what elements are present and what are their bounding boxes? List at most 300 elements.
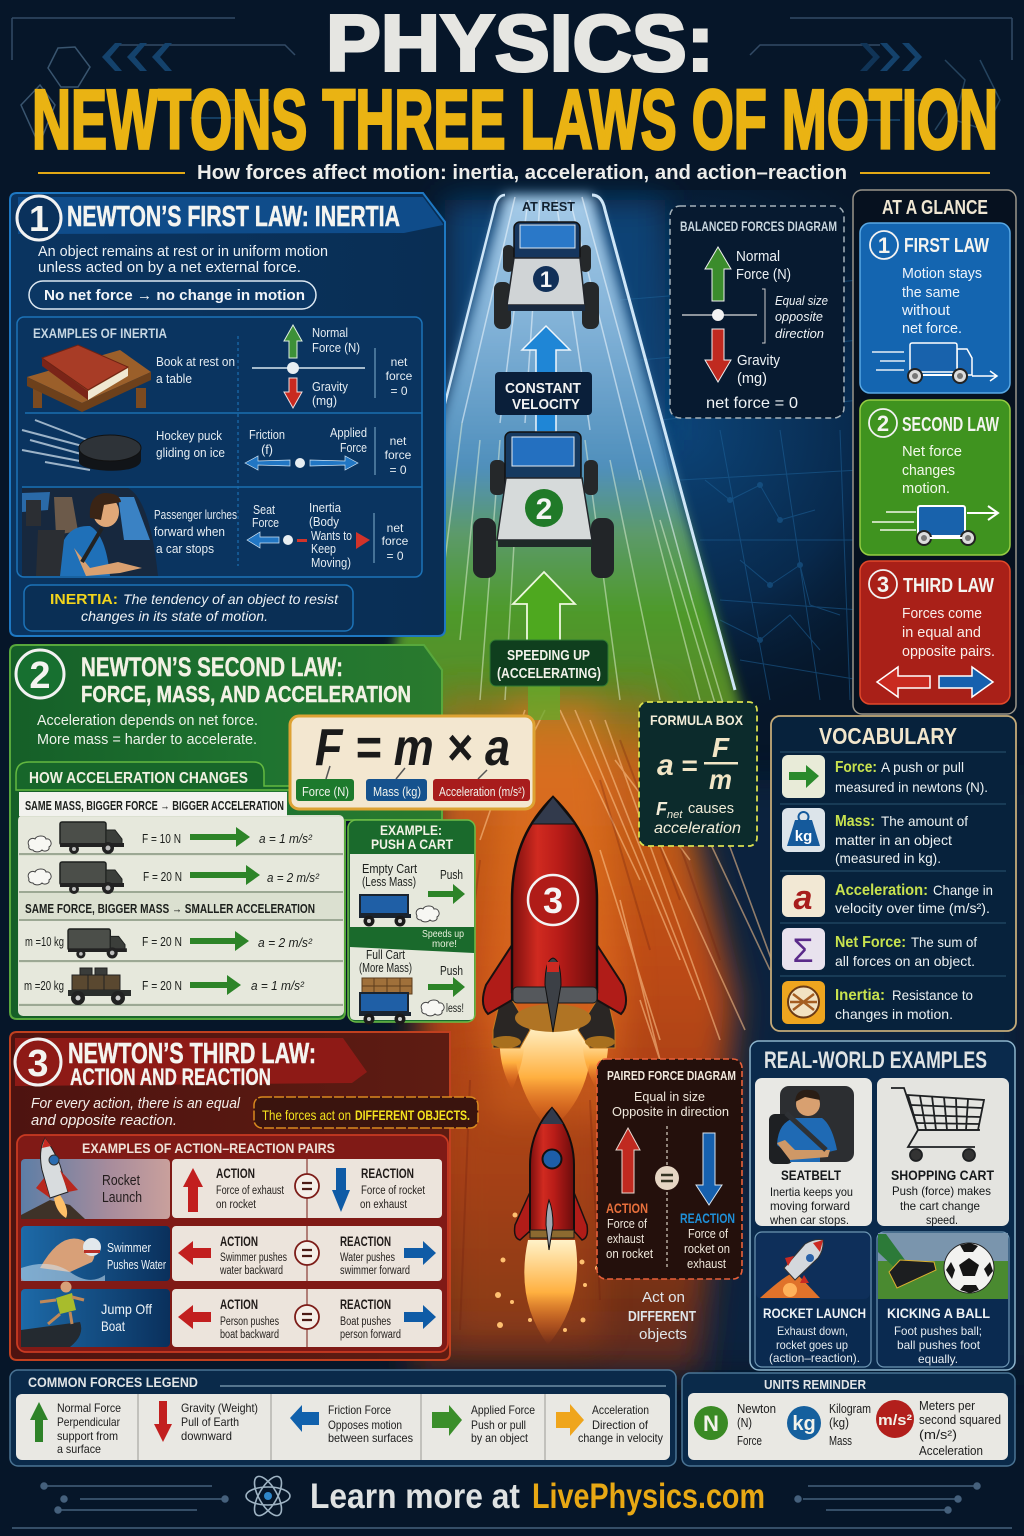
vocab: mass: Mass: (835, 813, 875, 830)
row: jump off boat: REACTION (340, 1297, 391, 1312)
unit: newton: N (703, 1411, 719, 1436)
icon: moving truck (872, 343, 997, 383)
text: puck example: Hockey puck (156, 428, 222, 443)
car 2: 2 (536, 493, 552, 526)
formula: F = m x a: Acceleration (m/s²) (439, 784, 525, 799)
card: third law: in equal and (902, 624, 981, 641)
legend: applied force (432, 1403, 535, 1445)
text: passenger example (154, 507, 237, 556)
unit: newton: Force (737, 1434, 762, 1448)
force diagram: puck (245, 426, 412, 477)
panel: third law (10, 1032, 478, 1360)
legend: friction: between surfaces (328, 1431, 413, 1445)
example: push a cart: EXAMPLE: (380, 822, 442, 838)
row: rocket launch: REACTION (361, 1166, 414, 1181)
second law heading (16, 650, 411, 707)
small rocket (495, 1108, 599, 1345)
card: second law (860, 400, 1010, 555)
callout: different objects: The forces act on (262, 1107, 351, 1123)
text: book example (156, 354, 235, 386)
card: third law: THIRD LAW (903, 575, 994, 597)
vocab: acceleration: Acceleration: (835, 882, 928, 899)
paired force diagram: rocket on (684, 1242, 730, 1256)
balanced forces diagram: Gravity (737, 353, 781, 369)
third law heading: 3 (27, 1043, 49, 1085)
vocab: force: Force: (835, 759, 877, 776)
note: act on different objects: Act on (642, 1290, 685, 1306)
label: speeding up (490, 640, 608, 686)
unit: meters per second squared: second squared (919, 1413, 1001, 1427)
first law description: An object remains at rest or in uniform motion (38, 243, 328, 260)
unit: meters per second squared (876, 1399, 1001, 1458)
panel: at a glance: AT A GLANCE (882, 197, 988, 219)
card: third law: 3 (877, 572, 889, 597)
panel: first law (10, 193, 445, 636)
legend: acceleration: Direction of (592, 1418, 649, 1432)
formula: F = m x a: F = m × a (315, 719, 510, 777)
panel: at a glance (853, 190, 1016, 714)
force diagram: puck: (f) (261, 443, 273, 457)
formula box: acceleration (654, 820, 741, 837)
card: second law: changes (902, 462, 955, 479)
footer link (310, 1477, 765, 1516)
balanced forces diagram: net force = 0 (706, 395, 798, 412)
icon: hockey puck (22, 420, 141, 471)
row: swimmer: Water pushes (340, 1252, 395, 1264)
icon: seated man with seatbelt (769, 1086, 854, 1164)
examples of inertia box (17, 317, 422, 577)
legend: friction (290, 1403, 413, 1445)
formula box: = (681, 750, 697, 781)
formula box: causes (688, 800, 734, 817)
balanced forces diagram: BALANCED FORCES DIAGRAM (680, 219, 837, 234)
row: swimmer: REACTION (340, 1234, 391, 1249)
car 1 at rest: 1 (540, 267, 552, 292)
formula: F = m x a (290, 716, 534, 809)
vocab: mass: (measured in kg). (835, 850, 941, 866)
second law heading: NEWTON’S SECOND LAW: (81, 652, 343, 682)
text: book example: a table (156, 371, 192, 386)
vocab: net force (782, 928, 977, 970)
car 1 at rest (494, 199, 599, 329)
paired force diagram (597, 1059, 742, 1279)
third law heading: ACTION AND REACTION (70, 1064, 271, 1091)
second law heading: FORCE, MASS, AND ACCELERATION (81, 681, 411, 707)
force diagram: passenger: force (382, 534, 409, 548)
panel: real-world examples (750, 1041, 1015, 1370)
vocab: force: A push or pull (881, 759, 964, 775)
callout: different objects (254, 1097, 478, 1128)
force diagram: book: Normal (312, 326, 348, 340)
vocab: acceleration (782, 875, 993, 917)
card: seatbelt: moving forward (770, 1199, 850, 1213)
paired force diagram: REACTION (680, 1210, 735, 1226)
row: rocket launch: Rocket (102, 1173, 140, 1189)
empty cart: Push (440, 868, 463, 882)
background grid and network (620, 280, 860, 700)
row: 10 kg: a = 2 m/s² (258, 935, 313, 950)
legend: applied force: by an object (471, 1431, 529, 1445)
second law heading: 2 (29, 655, 51, 697)
vocab: acceleration: a (794, 879, 812, 917)
icon: shopping cart (891, 1088, 984, 1161)
arrow: speeding up (513, 572, 575, 642)
text: book example: Book at rest on (156, 354, 235, 369)
formula box: F (712, 732, 730, 763)
legend: normal force: support from (57, 1429, 118, 1443)
full cart: Full Cart (366, 948, 405, 962)
balanced forces diagram: Normal (736, 249, 780, 265)
action reaction pairs table: EXAMPLES OF ACTION–REACTION PAIRS (82, 1140, 335, 1156)
paired force diagram: Opposite in direction (612, 1104, 729, 1119)
car 2 (473, 432, 614, 578)
card: third law (860, 561, 1010, 704)
row: jump off boat: boat backward (220, 1329, 279, 1341)
row: swimmer: Swimmer pushes (220, 1252, 287, 1264)
vocab: mass: The amount of (881, 813, 968, 829)
vocab: acceleration: velocity over time (m/s²). (835, 900, 990, 916)
unit: newton: (N) (737, 1416, 752, 1430)
third law heading (15, 1038, 316, 1091)
icon: passenger in stopping car (22, 488, 158, 576)
legend: normal force: a surface (57, 1442, 101, 1456)
force diagram: book: force (386, 369, 413, 383)
road with motion streaks (380, 195, 790, 1370)
paired force diagram: Equal in size (634, 1089, 705, 1104)
row: 20 kg: m =20 kg (24, 978, 64, 993)
vocab: inertia (782, 981, 973, 1024)
how acceleration changes table: HOW ACCELERATION CHANGES (29, 770, 248, 787)
how acceleration changes table: SAME FORCE, BIGGER MASS → SMALLER ACCELERATION (25, 902, 315, 916)
card: kicking a ball: KICKING A BALL (887, 1306, 990, 1321)
row: jump off boat: Person pushes (220, 1316, 279, 1328)
card: shopping cart: Push (force) makes (892, 1184, 991, 1198)
legend: normal force (30, 1401, 121, 1456)
empty cart (359, 862, 465, 926)
legend: gravity: Gravity (Weight) (181, 1401, 258, 1415)
text: puck example (156, 428, 225, 460)
panel: vocabulary (771, 716, 1016, 1031)
force diagram: passenger: Inertia (309, 501, 341, 515)
arrow: constant velocity (522, 326, 570, 432)
second law description: More mass = harder to accelerate. (37, 731, 257, 748)
row: rocket launch: Force of exhaust (216, 1185, 285, 1197)
third law description (31, 1095, 241, 1129)
force diagram: puck: Applied (330, 426, 367, 440)
row: 10 N (28, 822, 313, 854)
card: shopping cart: the cart change (900, 1199, 980, 1213)
paired force diagram: Force of (688, 1227, 728, 1241)
row: jump off boat: Jump Off (101, 1301, 152, 1317)
force diagram: passenger: Moving) (311, 556, 351, 570)
unit: meters per second squared: m/s² (878, 1412, 912, 1429)
third law description: For every action, there is an equal (31, 1095, 241, 1112)
row: rocket launch (21, 1138, 442, 1219)
unit: kilogram: (kg) (829, 1416, 849, 1430)
third law description: and opposite reaction. (31, 1112, 177, 1129)
force diagram: puck: Friction (249, 428, 285, 442)
second law description: Acceleration depends on net force. (37, 712, 258, 729)
full cart: less! (446, 1003, 464, 1015)
formula box: FORMULA BOX (650, 712, 744, 728)
empty cart: (Less Mass) (362, 875, 416, 889)
header decorations (12, 18, 1012, 145)
balanced forces diagram (670, 206, 844, 418)
callout: inertia definition: The tendency of an object to resist (123, 591, 339, 607)
example: push a cart (348, 820, 475, 1024)
card: kicking a ball: Foot pushes ball; (894, 1324, 982, 1338)
note: act on different objects: DIFFERENT (628, 1309, 696, 1325)
legend: friction: Opposes motion (328, 1418, 402, 1432)
vocab: mass: matter in an object (835, 832, 952, 848)
how acceleration changes table (16, 762, 344, 1016)
force diagram: passenger (247, 501, 409, 570)
how acceleration changes table: SAME MASS, BIGGER FORCE → BIGGER ACCELERATION (25, 799, 284, 813)
vocab: net force: The sum of (911, 934, 977, 950)
first law heading (17, 196, 400, 240)
legend: acceleration: change in velocity (578, 1431, 663, 1445)
unit: meters per second squared: Meters per (919, 1399, 975, 1413)
callout: different objects: DIFFERENT OBJECTS. (355, 1107, 470, 1123)
row: 20 N: a = 2 m/s² (267, 870, 320, 885)
force diagram: passenger: = 0 (386, 549, 404, 563)
first law description: unless acted on by a net external force. (38, 259, 301, 276)
vocab: inertia: changes in motion. (835, 1006, 953, 1022)
title (32, 0, 998, 166)
formula box: a (657, 749, 674, 782)
full cart: (More Mass) (359, 961, 412, 975)
row: jump off boat: Boat pushes (340, 1316, 391, 1328)
paired force diagram: exhaust (607, 1232, 644, 1246)
text: passenger example: forward when (154, 524, 225, 539)
card: rocket launch: rocket goes up (776, 1338, 848, 1352)
card: seatbelt: when car stops. (769, 1213, 849, 1227)
text: passenger example: Passenger lurches (154, 507, 237, 522)
row: 20 kg (24, 968, 305, 1005)
pill: no net force (29, 281, 316, 309)
card: kicking a ball: ball pushes foot (897, 1338, 981, 1352)
paired force diagram: exhaust (687, 1257, 726, 1271)
vocab: net force: Σ (792, 932, 814, 970)
label: constant velocity (495, 372, 592, 415)
note: act on different objects: objects (639, 1327, 687, 1343)
force diagram: puck: Force (340, 441, 367, 455)
row: jump off boat: ACTION (220, 1297, 258, 1312)
card: first law: FIRST LAW (904, 235, 989, 257)
force diagram: passenger: net (387, 521, 404, 535)
pill: no net force: No net force → no change in motion (44, 287, 305, 304)
row: swimmer: swimmer forward (340, 1265, 410, 1277)
legend: acceleration: Acceleration (592, 1403, 649, 1417)
panel: units reminder: UNITS REMINDER (764, 1377, 867, 1392)
example: push a cart: Speeds up (422, 928, 464, 940)
vocab: inertia: Inertia: (835, 987, 885, 1004)
row: swimmer (21, 1226, 442, 1281)
example: push a cart: PUSH A CART (371, 836, 453, 852)
panel: second law (10, 645, 534, 1024)
paired force diagram: Force of (607, 1217, 647, 1231)
card: first law (860, 223, 1010, 393)
vocab: net force: Net Force: (835, 934, 906, 951)
card: seatbelt: SEATBELT (781, 1168, 842, 1183)
card: shopping cart: speed. (926, 1213, 958, 1227)
vocab: acceleration: Change in (933, 882, 993, 898)
note: act on different objects (628, 1290, 696, 1343)
card: third law: Forces come (902, 605, 982, 622)
legend: acceleration (556, 1403, 663, 1445)
formula box: F (656, 799, 668, 819)
row: rocket launch: ACTION (216, 1166, 255, 1181)
force diagram: passenger: Seat (253, 503, 275, 517)
row: 20 N: F = 20 N (143, 869, 182, 884)
card: shopping cart (877, 1078, 1009, 1227)
formula box: m (709, 764, 732, 795)
paired force diagram: on rocket (606, 1247, 653, 1261)
card: second law: 2 (877, 411, 889, 436)
row: rocket launch: Launch (102, 1190, 142, 1206)
big rocket 3 (483, 797, 626, 1130)
footer decoration lines (12, 1483, 1012, 1528)
force diagram: passenger: Keep (311, 542, 336, 556)
legend: friction: Friction Force (328, 1403, 391, 1417)
examples of inertia box: EXAMPLES OF INERTIA (33, 325, 167, 341)
card: first law: Motion stays (902, 265, 982, 282)
row: jump off boat (21, 1282, 442, 1347)
first law heading: 1 (29, 198, 49, 239)
paired force diagram: ACTION (606, 1200, 648, 1216)
panel: units reminder (682, 1373, 1015, 1466)
balanced forces diagram: opposite (775, 309, 823, 324)
row: swimmer: ACTION (220, 1234, 258, 1249)
legend: applied force: Applied Force (471, 1403, 535, 1417)
force diagram: book: net (391, 355, 408, 369)
legend: normal force: Normal Force (57, 1401, 121, 1415)
balanced forces diagram: Equal size (775, 293, 828, 308)
row: swimmer: Swimmer (107, 1240, 152, 1255)
legend: gravity (154, 1401, 258, 1443)
force diagram: book: = 0 (390, 384, 408, 398)
row: jump off boat: person forward (340, 1329, 401, 1341)
footer link: Learn more at (310, 1477, 520, 1516)
vocab: force (782, 755, 988, 798)
formula: F = m x a: Force (N) (302, 784, 349, 799)
unit: kilogram: kg (792, 1413, 816, 1435)
panel: common forces legend: COMMON FORCES LEGEND (28, 1375, 198, 1390)
legend: applied force: Push or pull (471, 1418, 526, 1432)
icon: book on table (27, 345, 151, 412)
force diagram: passenger: (Body (309, 515, 340, 529)
callout: inertia definition (24, 585, 353, 631)
card: rocket launch: ROCKET LAUNCH (763, 1306, 866, 1321)
third law heading: NEWTON’S THIRD LAW: (68, 1038, 316, 1070)
text: puck example: gliding on ice (156, 445, 225, 460)
row: 10 kg: F = 20 N (142, 934, 182, 949)
footer link: LivePhysics.com (532, 1477, 765, 1516)
force diagram: puck: = 0 (389, 463, 407, 477)
first law description (38, 243, 328, 276)
force diagram: passenger: Wants to (311, 529, 352, 543)
big rocket 3: 3 (543, 880, 563, 921)
card: first law: net force. (902, 320, 962, 337)
row: 10 kg (25, 929, 313, 958)
vocab: inertia: Resistance to (892, 987, 973, 1003)
row: rocket launch: Force of rocket (361, 1185, 426, 1197)
legend: gravity: Pull of Earth (181, 1415, 239, 1429)
label: speeding up: (ACCELERATING) (497, 666, 601, 682)
card: kicking a ball: equally. (918, 1352, 958, 1366)
unit: newton (694, 1402, 776, 1448)
row: jump off boat: Boat (101, 1318, 125, 1334)
card: shopping cart: SHOPPING CART (891, 1168, 995, 1183)
text: passenger example: a car stops (156, 541, 214, 556)
card: second law: motion. (902, 480, 950, 497)
card: third law: opposite pairs. (902, 643, 995, 660)
second law description (37, 712, 258, 748)
callout: inertia definition: INERTIA: (50, 591, 118, 608)
first law heading: NEWTON’S FIRST LAW: INERTIA (67, 201, 400, 233)
card: first law: without (901, 302, 951, 319)
card: first law: the same (902, 284, 960, 301)
force diagram: puck: net (390, 434, 407, 448)
card: rocket launch: (action–reaction). (769, 1351, 860, 1365)
label: constant velocity: CONSTANT (505, 380, 581, 397)
force diagram: book: Force (N) (312, 341, 360, 355)
panel: vocabulary: VOCABULARY (819, 723, 957, 749)
row: 20 kg: a = 1 m/s² (251, 978, 305, 993)
subtitle: How forces affect motion: inertia, acceleration, and action–reaction (197, 162, 847, 184)
card: kicking a ball (877, 1232, 1009, 1367)
row: 10 kg: m =10 kg (25, 934, 64, 949)
row: 20 kg: F = 20 N (142, 978, 182, 993)
car 1 at rest: AT REST (522, 199, 575, 214)
card: seatbelt: Inertia keeps you (770, 1185, 853, 1199)
card: first law: 1 (878, 233, 890, 258)
card: second law: Net force (902, 443, 962, 460)
unit: meters per second squared: (m/s²) (919, 1428, 957, 1442)
formula: F = m x a: Mass (kg) (373, 784, 421, 799)
row: swimmer: water backward (219, 1265, 283, 1277)
full cart: Push (440, 964, 463, 978)
icon: opposite arrows (877, 667, 993, 697)
force diagram: book (252, 325, 413, 408)
force diagram: passenger: Force (252, 516, 279, 530)
balanced forces diagram: direction (775, 326, 824, 341)
label: constant velocity: VELOCITY (512, 396, 580, 413)
vocab: mass (782, 808, 968, 866)
unit: kilogram: Kilogram (829, 1402, 871, 1416)
row: rocket launch: on rocket (216, 1199, 257, 1211)
row: rocket launch: on exhaust (360, 1199, 408, 1211)
card: rocket launch: Exhaust down, (777, 1324, 848, 1338)
formula box (639, 702, 757, 846)
row: 20 N (28, 862, 320, 894)
balanced forces diagram: (mg) (737, 371, 767, 387)
full cart (359, 948, 465, 1024)
force diagram: book: (mg) (312, 394, 337, 408)
balanced forces diagram: Force (N) (736, 267, 791, 283)
formula box: net (667, 809, 683, 821)
callout: inertia definition: changes in its state of motion. (81, 608, 268, 624)
vocab: net force: all forces on an object. (835, 953, 975, 969)
label: speeding up: SPEEDING UP (507, 648, 590, 664)
force diagram: puck: force (385, 448, 412, 462)
row: 10 N: a = 1 m/s² (259, 831, 313, 846)
unit: kilogram: Mass (829, 1434, 852, 1448)
icon: accelerating cart (872, 506, 998, 545)
card: seatbelt (755, 1078, 872, 1227)
example: push a cart: more! (432, 938, 457, 950)
vocab: force: measured in newtons (N). (835, 779, 988, 795)
